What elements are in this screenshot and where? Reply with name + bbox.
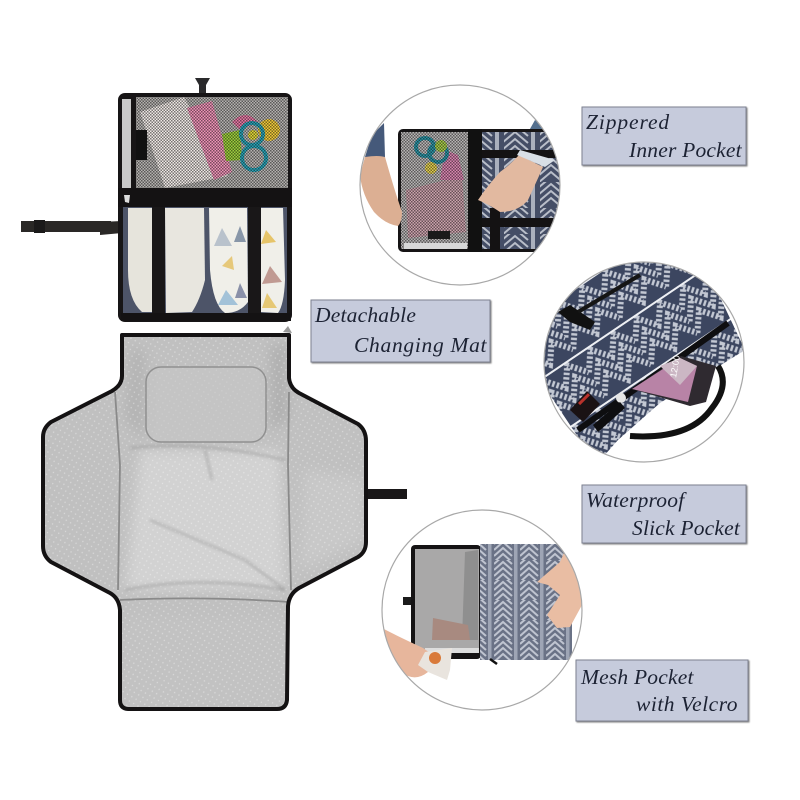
bottom zip bbox=[490, 659, 497, 664]
black tab bbox=[558, 305, 595, 330]
diaper four bbox=[261, 208, 285, 313]
straps bbox=[482, 150, 556, 158]
elastic strap one bbox=[152, 207, 165, 315]
zipper pull bbox=[124, 195, 130, 203]
pink bottle bbox=[187, 101, 232, 180]
label: waterproof slick pocket: Waterproof bbox=[586, 488, 687, 512]
patterned exterior bbox=[482, 132, 567, 249]
label: detachable changing mat bbox=[311, 300, 490, 362]
diaper three bbox=[209, 208, 248, 313]
infographic canvas bbox=[21, 78, 750, 724]
diaper one bbox=[128, 208, 152, 312]
wrinkles bbox=[125, 446, 285, 590]
open case bbox=[411, 545, 481, 659]
clock on phone: 12:00 bbox=[668, 354, 682, 378]
right hand bbox=[478, 155, 543, 212]
pull tab bbox=[403, 597, 411, 605]
label: zippered inner pocket bbox=[582, 107, 746, 165]
fold shading bbox=[462, 550, 478, 640]
zipper band bbox=[118, 188, 292, 207]
mat strap right bbox=[365, 489, 407, 499]
circle: mesh pocket with velcro photo bbox=[380, 510, 586, 710]
lower mesh background bbox=[123, 207, 287, 315]
teether toy bbox=[222, 115, 280, 170]
silver strip bbox=[425, 648, 479, 653]
sleeve right bbox=[530, 120, 542, 129]
pull tab top bbox=[195, 78, 210, 94]
case bbox=[398, 129, 544, 252]
upper mesh pocket bbox=[136, 97, 288, 188]
bottom binding bbox=[121, 313, 291, 321]
label: detachable changing mat: Detachable bbox=[314, 303, 416, 327]
changing mat bbox=[40, 326, 407, 715]
circle: zippered inner pocket photo bbox=[360, 85, 568, 285]
zipper pull bbox=[616, 393, 626, 403]
buckle strap left bbox=[21, 220, 122, 235]
pillow outline bbox=[146, 367, 266, 442]
patterned bag bbox=[540, 255, 745, 457]
polka dots bbox=[40, 330, 370, 715]
label: mesh pocket with velcro: with Velcro bbox=[636, 692, 738, 716]
handle loop bbox=[630, 366, 723, 436]
circle: waterproof slick pocket photo bbox=[540, 255, 745, 462]
spine bbox=[468, 129, 482, 252]
label: detachable changing mat: Changing Mat bbox=[354, 333, 488, 357]
toy card bbox=[418, 648, 452, 680]
label: zippered inner pocket: Zippered bbox=[586, 110, 670, 134]
label: mesh pocket with velcro: Mesh Pocket bbox=[580, 665, 694, 689]
left hand bbox=[360, 156, 402, 226]
left hand bbox=[384, 629, 428, 678]
zipper opening bbox=[578, 323, 728, 430]
right cuff bbox=[517, 150, 555, 167]
label: zippered inner pocket: Inner Pocket bbox=[628, 138, 743, 162]
fold seams bbox=[115, 392, 291, 602]
mat surface shading and folds bbox=[40, 330, 370, 715]
printed pouch bbox=[140, 97, 228, 188]
right hand bbox=[537, 553, 582, 628]
case body bbox=[118, 93, 292, 322]
mat base bbox=[43, 335, 366, 709]
grey mesh pocket bbox=[415, 549, 479, 653]
silver side flap bbox=[122, 99, 131, 188]
red brand tag bbox=[570, 391, 600, 422]
mat binding bbox=[43, 335, 366, 709]
label: waterproof slick pocket bbox=[582, 485, 746, 543]
phone bbox=[632, 356, 716, 406]
diaper two bbox=[165, 208, 205, 313]
folded organizer with mesh pocket and diapers bbox=[21, 78, 292, 322]
label: mesh pocket with velcro bbox=[576, 660, 748, 721]
sleeve left bbox=[365, 123, 385, 157]
label: waterproof slick pocket: Slick Pocket bbox=[632, 516, 741, 540]
patterned flap bbox=[480, 544, 572, 660]
pouch inside bbox=[432, 618, 470, 640]
black side tag bbox=[136, 130, 147, 160]
elastic strap two bbox=[248, 207, 261, 315]
mesh pocket bbox=[401, 132, 468, 249]
zipper corner bbox=[283, 326, 292, 333]
